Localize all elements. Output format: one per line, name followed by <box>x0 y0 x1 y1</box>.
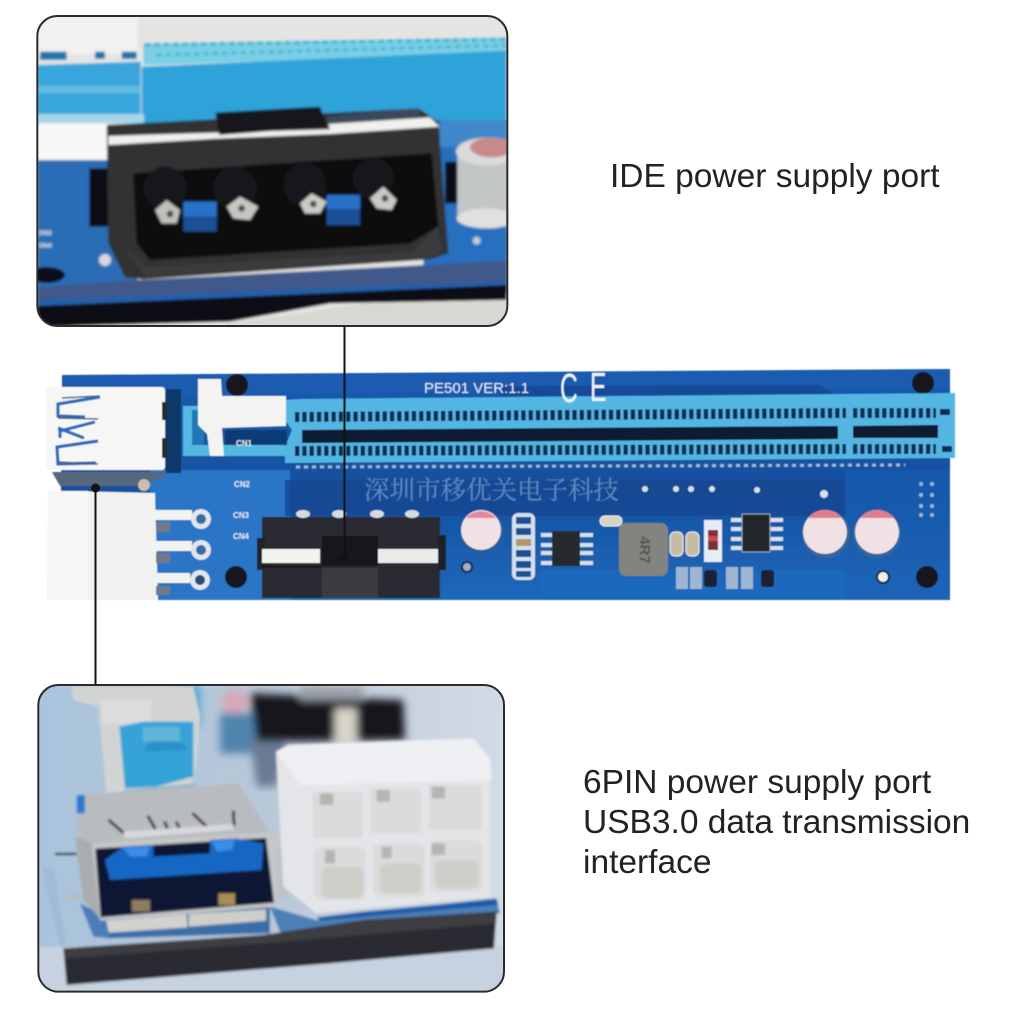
PCIe slot <box>285 393 955 463</box>
USB shell <box>78 783 269 844</box>
IDE connector on board <box>257 510 446 598</box>
callout line: USB and 6-pin <box>91 484 100 686</box>
pcb <box>60 369 950 600</box>
text block: 6PIN and USB description <box>583 764 970 881</box>
text block: 6PIN and USB description: USB3.0 data transmission <box>583 804 970 841</box>
resistor pack <box>512 513 535 580</box>
panel: riser board <box>46 365 955 600</box>
latch <box>72 687 200 793</box>
mounting holes <box>225 372 938 588</box>
labels CN2 CN3 CN4: CN1 <box>236 439 253 448</box>
chip 1 <box>541 531 593 566</box>
panel: IDE power port photo: ON3 <box>39 230 52 237</box>
capacitors <box>460 510 901 558</box>
slot contact dots <box>296 465 905 467</box>
inductor: 4R7 <box>636 536 653 564</box>
labels CN2 CN3 CN4: CN3 <box>233 511 250 520</box>
labels CN2 CN3 CN4: CN4 <box>233 532 250 541</box>
inductor <box>619 523 668 576</box>
teal clip <box>183 406 287 456</box>
CE mark: E <box>590 365 606 411</box>
CE mark: C <box>560 366 578 412</box>
labels CN2 CN3 CN4: CN2 <box>234 480 251 489</box>
chinese watermark: 深圳市移优关电子科技 <box>364 476 619 505</box>
blurred background parts <box>177 687 405 787</box>
panel: IDE power port photo: ON4 <box>39 242 52 249</box>
foam edge <box>62 921 498 986</box>
chip 2 <box>731 514 783 552</box>
white latch <box>198 379 286 456</box>
left board <box>45 868 65 945</box>
PCB strip <box>269 902 501 934</box>
USB blue tongue <box>105 838 263 880</box>
6-pin connector <box>276 738 492 913</box>
CE mark <box>560 365 606 412</box>
board text: PE501 VER:1.1: PE501 VER:1.1 <box>424 380 529 397</box>
heading: IDE power supply port: IDE power supply port <box>610 158 940 195</box>
panel: USB and 6-pin photo <box>38 685 504 992</box>
board edge <box>37 261 507 300</box>
callout line: IDE port <box>340 326 348 562</box>
text block: 6PIN and USB description: interface <box>583 844 712 881</box>
panel: IDE power port photo <box>28 16 517 327</box>
labels CN2 CN3 CN4 <box>233 439 253 541</box>
USB port <box>46 387 181 491</box>
connector body <box>107 107 448 279</box>
small components <box>462 482 934 589</box>
text block: 6PIN and USB description: 6PIN power supply port <box>583 764 932 801</box>
capacitor <box>456 137 517 228</box>
6-pin connector <box>47 491 211 600</box>
